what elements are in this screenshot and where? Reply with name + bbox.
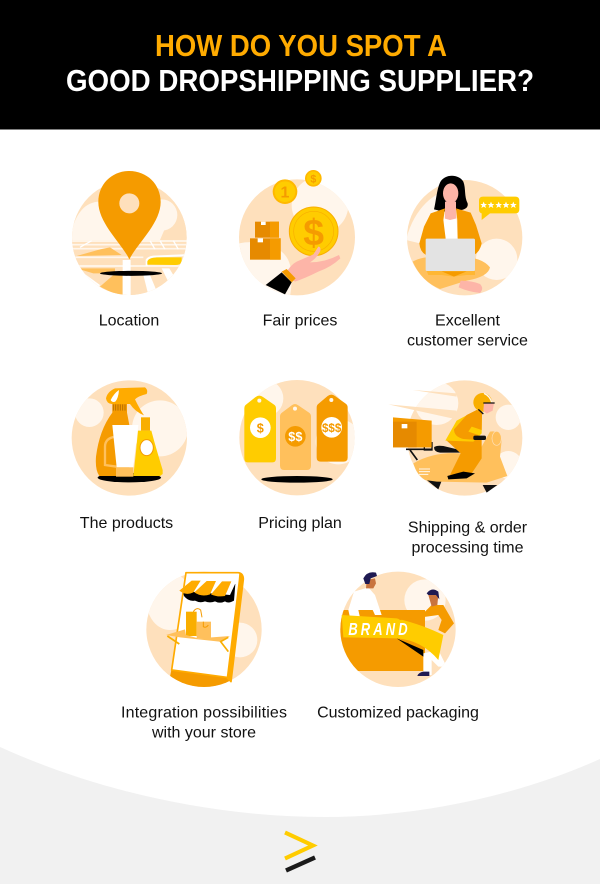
label: excellent customer service: customer service xyxy=(407,332,528,350)
ribbon shadow xyxy=(397,638,423,657)
label: shipping and order processing time: Shipping & order xyxy=(408,520,528,536)
exhaust vent xyxy=(419,469,430,474)
logo chevron xyxy=(285,832,313,858)
shelf xyxy=(166,629,230,642)
laptop xyxy=(426,239,475,271)
man trouser xyxy=(423,652,445,675)
label: pricing plan: Pricing plan xyxy=(258,515,342,532)
title line 1: HOW DO YOU SPOT A xyxy=(155,29,447,63)
brand text: BRAND xyxy=(348,620,411,640)
shopping bags xyxy=(186,609,211,638)
footer curve xyxy=(0,747,600,884)
label: integration possibilities: with your store xyxy=(151,724,256,742)
hair xyxy=(434,176,468,212)
neck xyxy=(445,202,456,221)
logo bar xyxy=(286,858,315,870)
title line 2: GOOD DROPSHIPPING SUPPLIER? xyxy=(66,64,534,98)
icon: products xyxy=(72,380,188,496)
pin xyxy=(98,171,161,259)
big coin: $ xyxy=(303,211,324,253)
orange box xyxy=(337,610,425,671)
face xyxy=(483,403,494,414)
icon: fair prices xyxy=(239,170,355,297)
laptop base xyxy=(427,271,475,277)
wheels xyxy=(427,480,497,493)
icon: location pin xyxy=(70,171,190,297)
shadow xyxy=(98,473,161,482)
man one shirt xyxy=(348,587,382,625)
shoe xyxy=(417,672,429,676)
rider trousers xyxy=(446,438,482,475)
small coin dollar: $ xyxy=(310,173,316,185)
spray head xyxy=(106,387,147,415)
phone bottom xyxy=(170,670,230,687)
man two head xyxy=(428,595,438,607)
speed lines xyxy=(388,390,457,419)
orange tag: $$$ xyxy=(322,421,342,435)
boxes xyxy=(250,222,281,260)
icon: pricing plan xyxy=(239,380,361,495)
face xyxy=(443,183,458,203)
scooter body xyxy=(413,431,507,483)
icon: shipping scooter xyxy=(388,380,522,496)
shirt xyxy=(444,218,458,240)
label: location: Location xyxy=(99,312,159,330)
awning xyxy=(179,581,236,596)
label: integration possibilities: Integration possibilities xyxy=(121,704,287,722)
ribbon xyxy=(342,615,443,660)
rack xyxy=(406,449,432,460)
yellow tag: $ xyxy=(257,421,264,435)
handle xyxy=(473,436,486,440)
label: customized packaging: Customized packaging xyxy=(317,704,479,722)
label: shipping and order processing time: processing time xyxy=(411,540,524,556)
legs xyxy=(413,256,490,289)
pin hole xyxy=(119,193,139,213)
torso xyxy=(445,410,482,442)
seat xyxy=(434,446,460,453)
phone body xyxy=(172,573,243,682)
yellow bottle xyxy=(133,431,163,476)
man one hair xyxy=(363,572,377,584)
header band xyxy=(0,0,600,130)
sleeve xyxy=(266,272,292,294)
logo xyxy=(285,832,315,870)
man one face xyxy=(366,578,376,588)
cuff xyxy=(282,269,296,282)
shoes xyxy=(447,472,475,479)
foot xyxy=(459,281,482,293)
jacket xyxy=(419,208,482,255)
shadow xyxy=(261,476,333,483)
icon: customized packaging xyxy=(337,572,456,687)
speech bubble xyxy=(479,197,519,220)
icon: customer service xyxy=(406,176,522,295)
small coin 1: 1 xyxy=(281,184,290,201)
spray bottle xyxy=(96,404,129,476)
light orange tag: $$ xyxy=(288,430,302,444)
ground shadow xyxy=(100,271,162,276)
label: fair prices: Fair prices xyxy=(263,312,337,330)
tube xyxy=(112,425,138,467)
box xyxy=(393,417,432,447)
label: excellent customer service: Excellent xyxy=(435,312,501,330)
icon: phone store xyxy=(146,572,262,693)
shelf legs xyxy=(167,636,228,652)
hand xyxy=(285,247,340,282)
right phone edge xyxy=(227,573,243,682)
label: the products: The products xyxy=(80,515,173,532)
awning shade xyxy=(183,584,235,603)
helmet xyxy=(473,393,492,412)
man two body xyxy=(397,605,454,633)
